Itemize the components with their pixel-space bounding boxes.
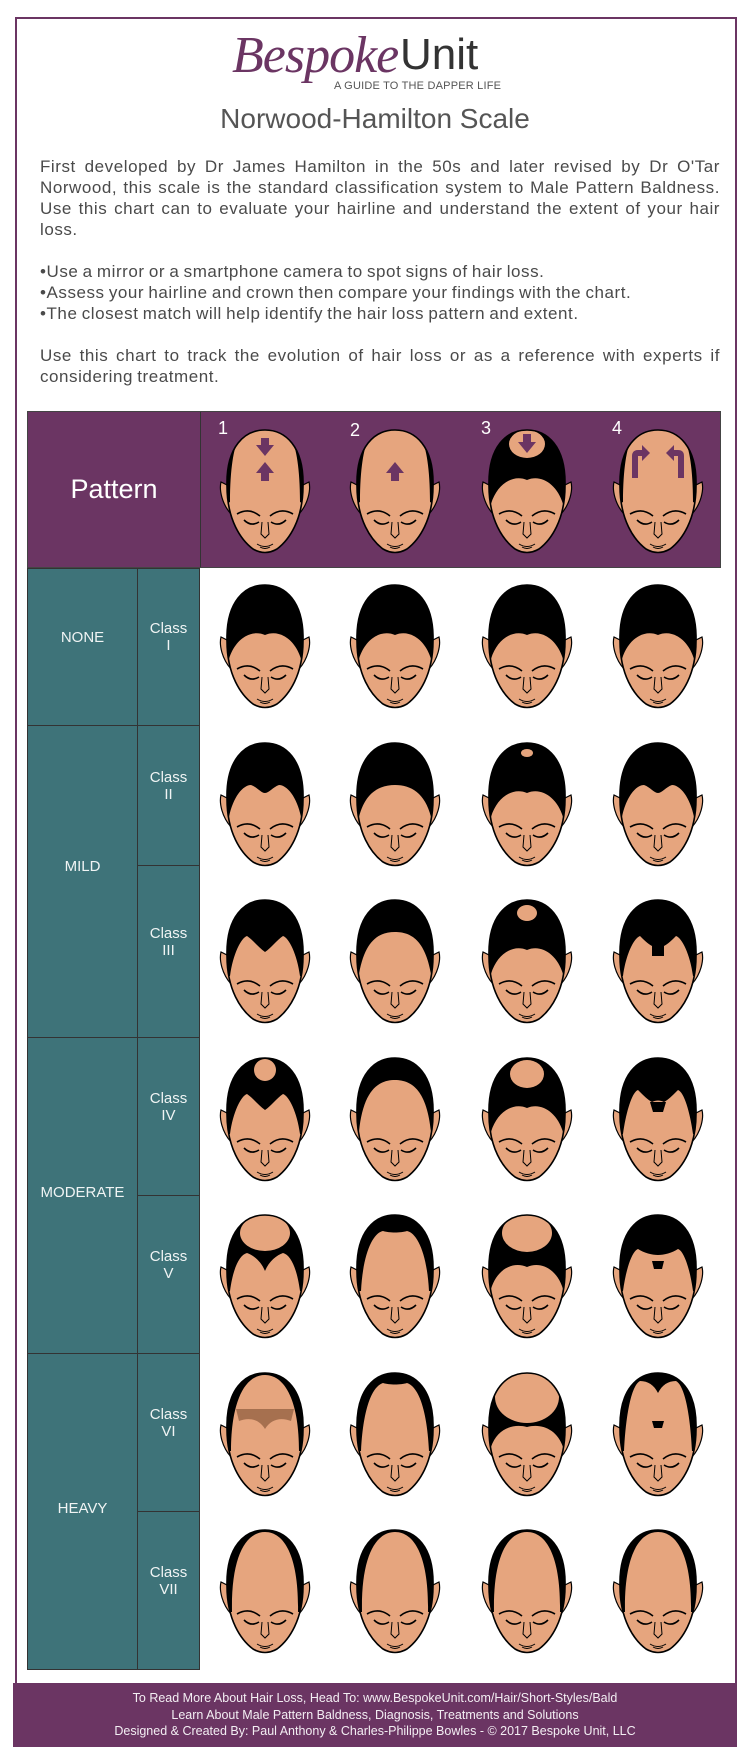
class VI bbox=[137, 1353, 200, 1512]
class IV heads bbox=[219, 1058, 704, 1186]
group HEAVY: HEAVY bbox=[58, 1500, 107, 1517]
logo script word: Bespoke bbox=[232, 27, 398, 84]
class VII: Class bbox=[150, 1564, 187, 1580]
class VII heads bbox=[219, 1530, 704, 1658]
pattern label bbox=[28, 412, 201, 567]
header band: 4 bbox=[612, 418, 622, 438]
class IV: Class bbox=[150, 1090, 187, 1106]
intro text bbox=[40, 157, 720, 386]
logo word Unit: Unit bbox=[400, 30, 478, 79]
class VI heads bbox=[219, 1371, 704, 1501]
class I bbox=[137, 568, 200, 726]
heads illustration grid bbox=[220, 429, 704, 1654]
pattern 4 head bbox=[612, 428, 704, 558]
header band: 2 bbox=[350, 420, 360, 440]
class VII bbox=[137, 1511, 200, 1670]
intro text: •Assess your hairline and crown then compare your findings with the chart. bbox=[40, 283, 631, 302]
class III: III bbox=[162, 942, 175, 958]
class V: Class bbox=[150, 1248, 187, 1264]
class III heads bbox=[219, 900, 704, 1028]
intro text: First developed by Dr James Hamilton in the 50s and later revised by Dr O'Tar Norwood, this scale is the standard classification system to Male Pattern Baldness. Use this chart can to evaluate your hairline and understand the extent of your hair loss. bbox=[40, 157, 720, 239]
class II bbox=[137, 725, 200, 866]
tagline: A GUIDE TO THE DAPPER LIFE bbox=[334, 80, 501, 92]
header band: 3 bbox=[481, 418, 491, 438]
group NONE: NONE bbox=[61, 628, 104, 646]
class VI: Class bbox=[150, 1406, 187, 1422]
intro text: Use this chart to track the evolution of hair loss or as a reference with experts if considering treatment. bbox=[40, 346, 720, 386]
footer: Learn About Male Pattern Baldness, Diagnosis, Treatments and Solutions bbox=[171, 1708, 579, 1722]
header band bbox=[27, 411, 721, 568]
title: Norwood-Hamilton Scale bbox=[220, 103, 530, 134]
intro text: •The closest match will help identify the hair loss pattern and extent. bbox=[40, 304, 579, 323]
logo bbox=[232, 27, 501, 92]
class II heads bbox=[219, 743, 704, 871]
class III: Class bbox=[150, 924, 187, 942]
footer: To Read More About Hair Loss, Head To: www.BespokeUnit.com/Hair/Short-Styles/Bald bbox=[133, 1691, 617, 1705]
pattern 1 head bbox=[219, 428, 311, 558]
teal classification column bbox=[27, 568, 200, 1670]
class I heads bbox=[219, 585, 704, 713]
group NONE bbox=[27, 568, 138, 726]
class IV bbox=[137, 1037, 200, 1196]
class VI: VI bbox=[161, 1422, 176, 1440]
class V heads bbox=[219, 1214, 704, 1343]
class III bbox=[137, 865, 200, 1038]
group MODERATE bbox=[27, 1037, 138, 1354]
pattern numbers: 1 bbox=[218, 418, 228, 438]
pattern label: Pattern bbox=[70, 474, 158, 504]
footer: Designed & Created By: Paul Anthony & Charles-Philippe Bowles - © 2017 Bespoke Unit, LLC bbox=[114, 1724, 636, 1738]
group MILD: MILD bbox=[65, 858, 100, 875]
group HEAVY bbox=[27, 1353, 138, 1670]
group MODERATE: MODERATE bbox=[41, 1184, 124, 1201]
footer bbox=[13, 1683, 737, 1747]
class V: V bbox=[163, 1264, 174, 1282]
class IV: IV bbox=[161, 1106, 176, 1124]
class II: Class bbox=[150, 768, 187, 786]
pattern 2 head bbox=[349, 428, 441, 558]
intro text: •Use a mirror or a smartphone camera to spot signs of hair loss. bbox=[40, 262, 544, 281]
group MILD bbox=[27, 725, 138, 1038]
class II: II bbox=[164, 786, 173, 802]
pattern 3 head bbox=[481, 430, 573, 558]
class I: I bbox=[166, 637, 171, 654]
class V bbox=[137, 1195, 200, 1354]
class VII: VII bbox=[159, 1580, 178, 1598]
header heads bbox=[219, 428, 704, 558]
class I: Class bbox=[150, 620, 187, 637]
